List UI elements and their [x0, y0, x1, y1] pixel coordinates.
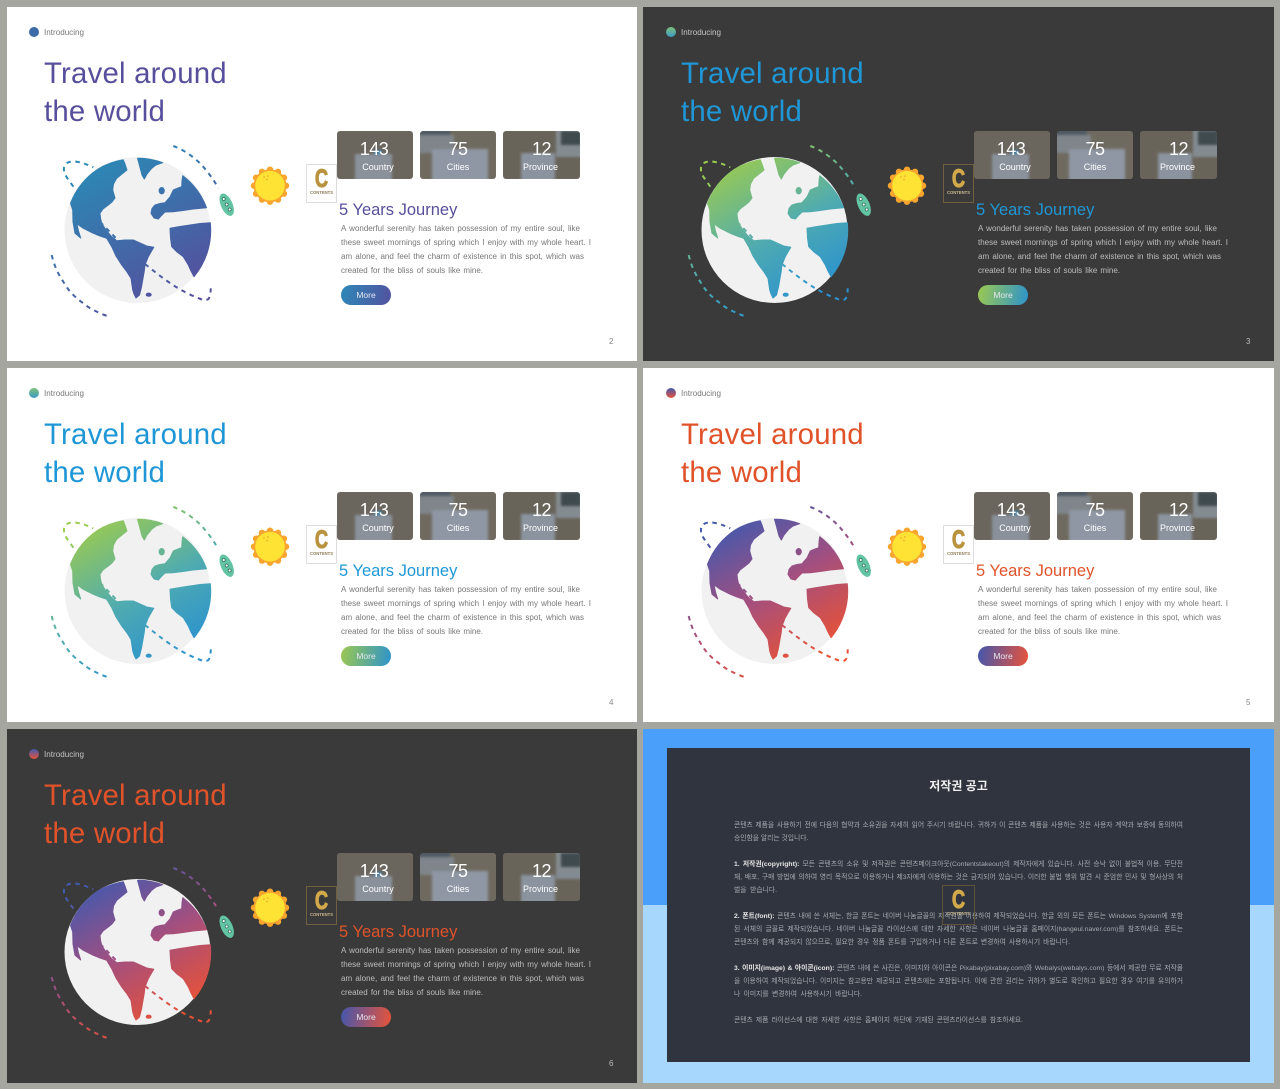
stat card: cities: 75 [448, 500, 468, 520]
logo: CONTENTS [947, 190, 970, 195]
title: Travel around [44, 418, 227, 451]
panel: copyright notice: 나 이미지를 변경하여 사용하시기 바랍니다. [734, 991, 862, 998]
section label: Introducing [44, 28, 84, 36]
title [44, 57, 227, 128]
title: the world [681, 95, 802, 128]
stat card: cities [420, 492, 496, 540]
stat card: country: 143 [360, 139, 388, 159]
globe continents [70, 519, 211, 659]
logo: C [315, 165, 328, 193]
stat card: country [974, 492, 1050, 540]
dashed orbits [52, 507, 218, 677]
title [681, 57, 864, 128]
globe continents [708, 519, 848, 659]
stat card: country [974, 131, 1050, 179]
icon: sun [251, 166, 289, 205]
page number: 5 [1246, 698, 1250, 707]
stat card: cities: Cities [447, 884, 469, 894]
notice intro [734, 821, 1183, 842]
page number: 2 [609, 337, 613, 346]
panel: slide 2, white with teal-purple theme [7, 7, 637, 361]
body text: created for the bliss of souls like mine. [341, 988, 483, 997]
section marker dot [29, 388, 39, 398]
stat card: province: Province [523, 523, 558, 533]
body text: A wonderful serenity has taken possession of my entire soul, like [341, 946, 580, 955]
body text [341, 224, 591, 275]
stat card: cities: 75 [448, 139, 468, 159]
button: more: More [356, 1012, 376, 1022]
stat card: country: Country [362, 523, 394, 533]
body text: these sweet mornings of spring which I enjoy with my whole heart. I [978, 599, 1228, 608]
icon: rocket [854, 552, 874, 579]
panel: copyright notice: 벌을 받습니다. [734, 887, 777, 894]
page number: 4 [609, 698, 613, 707]
panel: slide 6, dark with blue-red theme [7, 729, 637, 1083]
dashed orbits [52, 868, 218, 1038]
logo: CONTENTS [310, 551, 333, 556]
stat card: country [337, 131, 413, 179]
section label: Introducing [44, 750, 84, 758]
body text: am alone, and feel the charm of existence in this spot, which was [978, 252, 1221, 261]
subheading: 5 Years Journey [976, 562, 1094, 580]
stat card: cities [420, 131, 496, 179]
button: more: More [993, 290, 1013, 300]
body text [341, 585, 591, 636]
globe sphere [64, 879, 210, 1025]
title [44, 779, 227, 850]
body text: these sweet mornings of spring which I enjoy with my whole heart. I [341, 238, 591, 247]
globe continents [70, 158, 211, 298]
subheading: 5 Years Journey [339, 562, 457, 580]
stat card: province: 12 [532, 500, 551, 520]
body text: am alone, and feel the charm of existence in this spot, which was [978, 613, 1221, 622]
dashed orbits [689, 146, 855, 316]
body text: created for the bliss of souls like mine. [341, 627, 483, 636]
title: the world [44, 95, 165, 128]
title: Travel around [44, 57, 227, 90]
stat card: cities: 75 [1085, 500, 1105, 520]
page number: 6 [609, 1059, 613, 1068]
logo: C [315, 526, 328, 554]
stat card: province: 12 [1169, 500, 1188, 520]
icon: rocket [217, 191, 237, 218]
button: more: More [993, 651, 1013, 661]
panel: copyright notice: 된 서체의 글꼴로 제작되었습니다. 네이버 나눔글꼴 라이선스에 대한 자세한 사항은 네이버 나눔글꼴 홈페이지(hangeul.naver.com)를 참조하세요. 폰트는 [734, 926, 1183, 933]
subheading: 5 Years Journey [339, 923, 457, 941]
notice section 2: font [734, 912, 1183, 946]
panel: copyright notice: 3. 이미지(image) & 아이콘(icon): 콘텐츠 내에 쓴 사진은, 이미지와 아이콘은 Pixabay(pixabay.com)와 Webalys(webalys.com) 등에서 제공한 무료 저작물 [734, 965, 1183, 972]
panel: slide 5, white with blue-red theme [643, 368, 1274, 722]
title: the world [44, 456, 165, 489]
body text: these sweet mornings of spring which I enjoy with my whole heart. I [978, 238, 1228, 247]
logo watermark: C [952, 886, 965, 914]
stat card: country: 143 [360, 861, 388, 881]
globe sphere [702, 157, 848, 303]
stat card: country [337, 492, 413, 540]
globe illustration [50, 867, 290, 1039]
body text: A wonderful serenity has taken possession of my entire soul, like [341, 585, 580, 594]
section marker dot [29, 27, 39, 37]
body text: A wonderful serenity has taken possession of my entire soul, like [978, 585, 1217, 594]
button: more [978, 285, 1028, 305]
stat card: country: 143 [997, 500, 1025, 520]
logo [306, 886, 337, 925]
logo [306, 164, 337, 203]
stat card: province: 12 [1169, 139, 1188, 159]
stat card: cities: 75 [448, 861, 468, 881]
globe illustration [50, 145, 290, 317]
dashed orbits [52, 146, 218, 316]
stat card: province [1140, 492, 1217, 540]
subheading: 5 Years Journey [339, 201, 457, 219]
body text: created for the bliss of souls like mine. [978, 266, 1120, 275]
body text [978, 224, 1228, 275]
button: more [978, 646, 1028, 666]
stat card: province: Province [1160, 523, 1195, 533]
globe continents [708, 158, 848, 298]
stat card: province: Province [523, 162, 558, 172]
button: more [341, 285, 391, 305]
subheading: 5 Years Journey [976, 201, 1094, 219]
button: more [341, 646, 391, 666]
logo: C [315, 887, 328, 915]
notice closing line: 콘텐츠 제품 라이선스에 대한 자세한 사항은 홈페이지 하단에 기재된 콘텐츠라이선스를 참조하세요. [734, 1017, 1023, 1024]
section marker dot [29, 749, 39, 759]
notice dark card [667, 748, 1250, 1062]
stat card: cities: 75 [1085, 139, 1105, 159]
icon: sun [251, 528, 289, 566]
button: more: More [356, 651, 376, 661]
stat card: province [503, 492, 580, 540]
section label: Introducing [681, 28, 721, 36]
logo [306, 525, 337, 564]
stat card: country: Country [999, 523, 1031, 533]
title: Travel around [44, 779, 227, 812]
panel: copyright notice: 콘텐츠 제품을 사용하기 전에 다음의 협약과 소유권을 자세히 읽어 주시기 바랍니다. 귀하가 이 콘텐츠 제품을 사용하는 것은 사용자 계약과 보증에 동의하여 [734, 822, 1183, 829]
globe sphere [64, 518, 210, 664]
globe sphere [702, 518, 848, 664]
stat card: country: 143 [360, 500, 388, 520]
body text [978, 585, 1228, 636]
body text: created for the bliss of souls like mine. [978, 627, 1120, 636]
title [44, 418, 227, 489]
body text: these sweet mornings of spring which I enjoy with my whole heart. I [341, 960, 591, 969]
panel: copyright notice: 콘텐츠와 함께 제공되지 않으므로, 필요한 경우 정품 폰트를 구입하거나 다른 폰트로 변경하여 사용하시기 바랍니다. [734, 939, 1070, 946]
title: the world [44, 817, 165, 850]
stat card: country: Country [999, 162, 1031, 172]
icon: rocket [854, 191, 874, 218]
button: more: More [356, 290, 376, 300]
title: the world [681, 456, 802, 489]
logo: CONTENTS [310, 190, 333, 195]
body text: these sweet mornings of spring which I enjoy with my whole heart. I [341, 599, 591, 608]
stat card: province: 12 [532, 139, 551, 159]
logo: C [952, 526, 965, 554]
body text: am alone, and feel the charm of existence in this spot, which was [341, 613, 584, 622]
stat card: province: Province [1160, 162, 1195, 172]
body text: am alone, and feel the charm of existence in this spot, which was [341, 252, 584, 261]
notice section 3: image and icon [734, 964, 1183, 998]
globe illustration [688, 145, 926, 317]
stat card: cities: Cities [447, 162, 469, 172]
stat card: cities: Cities [1084, 523, 1106, 533]
stat card: province [1140, 131, 1217, 179]
logo [943, 525, 974, 564]
logo: C [952, 165, 965, 193]
body text [341, 946, 591, 997]
panel: copyright notice: 을 이용하여 제작되었습니다. 이미지는 참고용만 제공되고 콘텐츠에는 포함됩니다. 이에 관한 권리는 귀하가 별도로 확인하고 필요한 경우 여기를 유의하거 [734, 978, 1183, 985]
stat card: country: Country [362, 162, 394, 172]
stat card: province [503, 131, 580, 179]
panel: copyright notice: 승인함을 알리는 것입니다. [734, 835, 808, 842]
section label: Introducing [44, 388, 84, 398]
stat card: country: 143 [997, 139, 1025, 159]
title [681, 418, 864, 489]
notice section 1: copyright [734, 860, 1183, 894]
section marker dot [666, 27, 676, 37]
panel: copyright notice: 재, 배포, 구매 방법에 의하여 영리 목적으로 이용하거나 제3자에게 이용하는 것은 금지되어 있습니다. 이러한 불법 행위 발견 시 준엄한 민사 및 형사상의 처 [734, 874, 1183, 881]
page number: 3 [1246, 337, 1250, 346]
notice heading: 저작권 공고 [929, 779, 988, 793]
title: Travel around [681, 418, 864, 451]
globe continents [70, 880, 211, 1020]
panel: slide 3, dark with green-blue theme [643, 7, 1274, 361]
stat card: province [503, 853, 580, 901]
icon: rocket [217, 552, 237, 579]
stat card: cities [1057, 492, 1133, 540]
panel: copyright notice: 1. 저작권(copyright): 모든 콘텐츠의 소유 및 저작권은 콘텐츠메이크아웃(Contentstakeout)의 제작자에게 있습니다. 사전 승낙 없이 불법적 이용, 무단전 [734, 861, 1183, 868]
body text: am alone, and feel the charm of existence in this spot, which was [341, 974, 584, 983]
body text: A wonderful serenity has taken possession of my entire soul, like [341, 224, 580, 233]
button: more [341, 1007, 391, 1027]
stat card: country [337, 853, 413, 901]
icon: sun [251, 888, 289, 927]
stat card: country: Country [362, 884, 394, 894]
stat card: cities: Cities [1084, 162, 1106, 172]
panel: copyright notice: 2. 폰트(font): 콘텐츠 내에 쓴 서체는, 한글 폰트는 네이버 나눔글꼴의 저작권을 이용하여 제작되었습니다. 한글 외의 모든 폰트는 Windows System에 포함 [734, 913, 1183, 920]
icon: rocket [217, 913, 237, 940]
section marker dot [666, 388, 676, 398]
globe illustration [50, 506, 290, 678]
logo watermark: CONTENTS [947, 911, 970, 916]
stat card: province: 12 [532, 861, 551, 881]
icon: sun [888, 166, 926, 205]
icon: sun [888, 528, 926, 566]
section label: Introducing [681, 388, 721, 398]
stat card: province: Province [523, 884, 558, 894]
logo [943, 164, 974, 203]
dashed orbits [689, 507, 855, 677]
title: Travel around [681, 57, 864, 90]
body text: A wonderful serenity has taken possession of my entire soul, like [978, 224, 1217, 233]
stat card: cities: Cities [447, 523, 469, 533]
globe sphere [64, 157, 210, 303]
body text: created for the bliss of souls like mine. [341, 266, 483, 275]
panel: copyright notice background [643, 729, 1274, 1083]
stat card: cities [1057, 131, 1133, 179]
stat card: cities [420, 853, 496, 901]
panel: slide 4, white with green-blue theme [7, 368, 637, 722]
logo watermark [942, 885, 975, 925]
globe illustration [688, 506, 926, 678]
logo: CONTENTS [310, 912, 333, 917]
logo: CONTENTS [947, 551, 970, 556]
